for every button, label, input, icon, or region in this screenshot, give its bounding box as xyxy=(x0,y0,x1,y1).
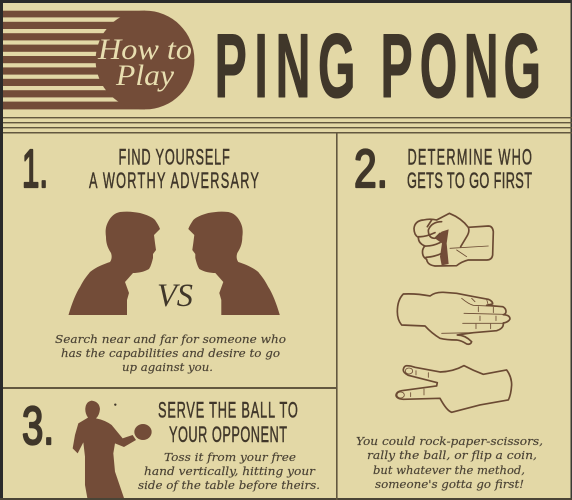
heading: determine who gets to go first: DETERMINE WHO xyxy=(408,145,532,169)
step number 3: 3. xyxy=(22,396,54,456)
icon: scissors hand xyxy=(396,366,512,412)
heading: determine who gets to go first: GETS TO GO FIRST xyxy=(407,168,532,193)
heading: determine who gets to go first xyxy=(407,145,532,193)
text: step 2 body: You could rock-paper-scissors, xyxy=(356,435,543,448)
heading: serve the ball to your opponent xyxy=(158,398,298,447)
step number 1: 1. xyxy=(22,139,48,199)
heading: serve the ball to your opponent: YOUR OPPONENT xyxy=(169,422,287,447)
text: step 3 body: side of the table before theirs. xyxy=(138,479,320,492)
text: step 3 body: hand vertically, hitting your xyxy=(144,465,316,478)
text: step 1 body xyxy=(55,333,286,374)
icon: player silhouette with paddle xyxy=(73,401,152,498)
text: step 2 body xyxy=(356,435,543,491)
panel: step 1 xyxy=(22,139,286,374)
header badge: How to Play: Play xyxy=(115,59,175,92)
icon: rock fist xyxy=(414,213,493,266)
text: step 1 body: up against you. xyxy=(122,361,213,374)
text: step 2 body: but whatever the method, xyxy=(373,464,525,477)
text: step 2 body: rally the ball, or flip a coin, xyxy=(367,449,537,462)
heading: find yourself a worthy adversary: A WORTHY ADVERSARY xyxy=(89,168,259,193)
title: PINGPONG xyxy=(215,16,541,117)
panel: step 3 xyxy=(22,396,320,498)
heading: serve the ball to your opponent: SERVE THE BALL TO xyxy=(158,398,298,422)
text: step 3 body: Toss it from your free xyxy=(164,451,297,464)
step number 2: 2. xyxy=(354,139,388,199)
text: step 1 body: has the capabilities and desire to go xyxy=(61,347,280,360)
icon: two silhouettes facing xyxy=(68,212,280,315)
text: step 2 body: someone's gotta go first! xyxy=(375,478,524,491)
text: step 3 body xyxy=(138,451,320,492)
icons: rock paper scissors hands xyxy=(396,213,512,412)
heading: find yourself a worthy adversary xyxy=(89,145,259,193)
header badge: How to Play: How to xyxy=(97,33,192,66)
header badge: How to Play xyxy=(3,11,194,109)
icon: paper hand xyxy=(397,292,510,344)
panel: step 2 xyxy=(354,139,543,491)
heading: find yourself a worthy adversary: FIND YOURSELF xyxy=(118,145,230,169)
text: step 1 body: Search near and far for someone who xyxy=(55,333,286,346)
VS label: VS xyxy=(157,278,193,314)
